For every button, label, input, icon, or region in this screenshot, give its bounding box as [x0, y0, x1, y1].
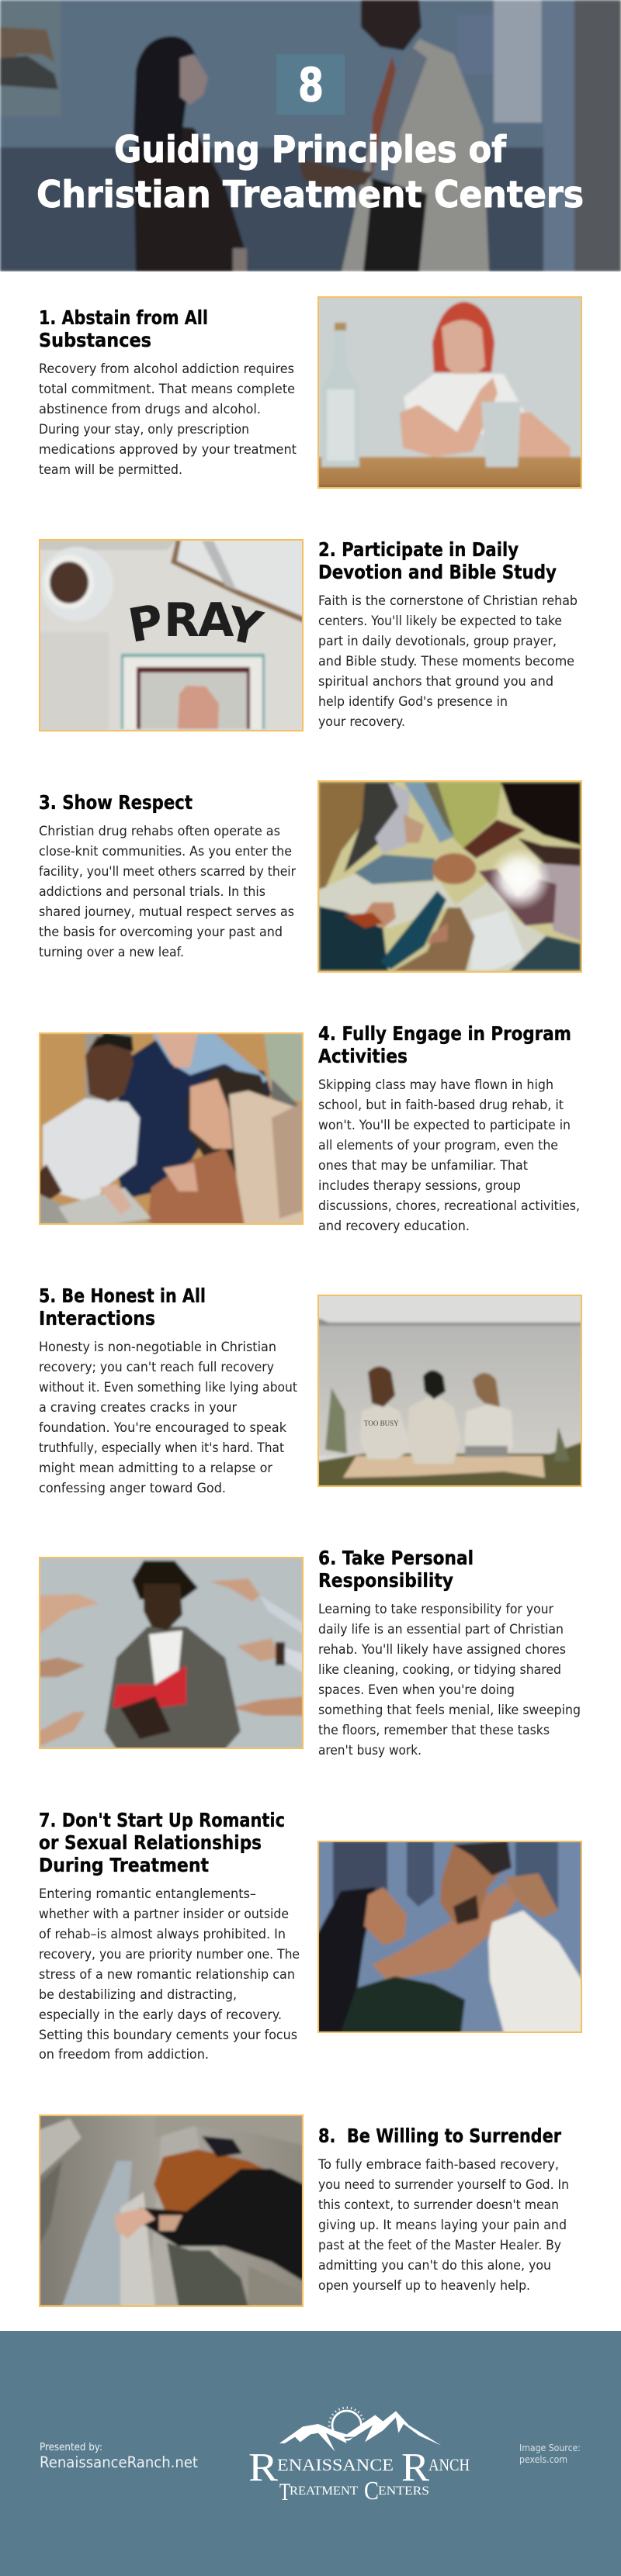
body text 7: Entering romantic entanglements– — [39, 1886, 256, 1901]
body text 7 — [39, 1886, 300, 2062]
heading 8: 8. Be Willing to Surrender — [318, 2125, 562, 2147]
PRAY letters: A — [198, 593, 234, 648]
logo: Renaissance Ranch Treatment Centers — [248, 2408, 470, 2505]
number badge — [276, 54, 345, 115]
section 5: honesty — [39, 1285, 582, 1495]
PRAY letters: R — [164, 593, 199, 648]
heading 6: 6. Take Personal — [318, 1547, 474, 1569]
body text 1: total commitment. That means complete — [39, 381, 295, 396]
photo: three friends by a lake — [317, 1295, 582, 1487]
body text 7: Setting this boundary cements your focus — [39, 2027, 297, 2042]
icon: sun and mountains — [279, 2408, 441, 2452]
body text 5: Honesty is non-negotiable in Christian — [39, 1339, 276, 1354]
body text 4: Skipping class may have flown in high — [318, 1077, 553, 1092]
body text 1: During your stay, only prescription — [39, 421, 249, 437]
body text 4: discussions, chores, recreational activities, — [318, 1198, 580, 1213]
body text 6: daily life is an essential part of Christian — [318, 1621, 564, 1637]
body text 7: especially in the early days of recovery. — [39, 2007, 282, 2022]
body text 5: truthfully, especially when it's hard. That — [39, 1440, 284, 1455]
section 3: show respect — [39, 776, 595, 983]
body text 5: without it. Even something like lying about — [39, 1379, 297, 1395]
body text 2: centers. You'll likely be expected to take — [318, 613, 562, 628]
heading 4: 4. Fully Engage in Program — [318, 1022, 571, 1045]
body text 2: spiritual anchors that ground you and — [318, 673, 553, 689]
body text 6: spaces. Even when you're doing — [318, 1682, 515, 1697]
number badge: 8 — [298, 58, 324, 112]
body text 6: the floors, remember that these tasks — [318, 1722, 550, 1738]
logo: Renaissance Ranch Treatment Centers: ENTERS — [378, 2484, 429, 2498]
section 1: abstain — [39, 296, 582, 489]
heading 1: 1. Abstain from All — [39, 306, 208, 329]
body text 6: something that feels menial, like sweeping — [318, 1702, 581, 1717]
body text 3: Christian drug rehabs often operate as — [39, 823, 280, 838]
body text 7: recovery, you are priority number one. The — [39, 1946, 300, 1962]
body text 4: school, but in faith-based drug rehab, it — [318, 1097, 564, 1112]
body text 7: on freedom from addiction. — [39, 2046, 209, 2062]
body text 4: ones that may be unfamiliar. That — [318, 1157, 528, 1173]
heading 2: 2. Participate in Daily — [318, 538, 519, 561]
body text 3: turning over a new leaf. — [39, 944, 184, 960]
heading 5: Interactions — [39, 1307, 155, 1329]
PRAY letters — [124, 593, 268, 657]
logo: Renaissance Ranch Treatment Centers: C — [364, 2477, 379, 2505]
body text 8: you need to surrender yourself to God. In — [318, 2177, 569, 2192]
logo: Renaissance Ranch Treatment Centers: ANCH — [428, 2455, 470, 2474]
body text 6: aren't busy work. — [318, 1742, 422, 1758]
logo: Renaissance Ranch Treatment Centers: REATMENT — [290, 2484, 358, 2498]
body text 3 — [39, 823, 296, 960]
body text 8 — [317, 2156, 569, 2293]
presented by: Presented by: — [40, 2442, 102, 2453]
photo: man with notebook, fingers pointing — [39, 1557, 304, 1749]
section 7: no romantic relationships — [39, 1809, 582, 2062]
body text 2: part in daily devotionals, group prayer, — [318, 633, 557, 648]
heading 4 — [318, 1022, 571, 1067]
body text 5: confessing anger toward God. — [39, 1480, 226, 1495]
title: Guiding Principles of — [114, 129, 506, 171]
body text 8: past at the feet of the Master Healer. By — [318, 2237, 561, 2253]
heading 5: 5. Be Honest in All — [39, 1285, 206, 1307]
body text 4: won't. You'll be expected to participate in — [318, 1117, 571, 1132]
body text 2: and Bible study. These moments become — [318, 653, 574, 669]
body text 2: Faith is the cornerstone of Christian rehab — [318, 593, 578, 608]
heading 2: Devotion and Bible Study — [318, 561, 557, 583]
body text 6 — [318, 1601, 581, 1758]
body text 4: includes therapy sessions, group — [318, 1177, 521, 1193]
logo: Renaissance Ranch Treatment Centers: R — [401, 2446, 429, 2490]
body text 8: open yourself up to heavenly help. — [318, 2277, 530, 2293]
body text 3: addictions and personal trials. In this — [39, 883, 265, 899]
body text 1 — [39, 361, 297, 477]
body text 6: like cleaning, cooking, or tidying shared — [318, 1661, 561, 1677]
presented by: RenaissanceRanch.net — [40, 2453, 198, 2471]
body text 5: might mean admitting to a relapse or — [39, 1460, 272, 1475]
heading 1: Substances — [39, 329, 151, 351]
heading 2 — [318, 538, 557, 583]
section 2: daily devotion — [39, 538, 578, 731]
body text 1: team will be permitted. — [39, 462, 182, 477]
title — [36, 129, 584, 216]
body text 1: abstinence from drugs and alcohol. — [39, 401, 261, 417]
heading 7 — [39, 1809, 285, 1876]
heading 3: 3. Show Respect — [39, 791, 193, 814]
body text 2 — [318, 593, 578, 729]
photo: embracing couple — [317, 1841, 582, 2033]
body text 8: this context, to surrender doesn't mean — [318, 2197, 559, 2212]
logo: Renaissance Ranch Treatment Centers: ENAISSANCE — [277, 2455, 394, 2474]
PRAY letters: P — [124, 594, 168, 654]
heading 5 — [39, 1285, 206, 1329]
body text 1: medications approved by your treatment — [39, 441, 297, 457]
image source — [519, 2443, 581, 2465]
section 8: surrender — [39, 2114, 569, 2307]
footer panel — [0, 2331, 621, 2576]
body text 2: your recovery. — [318, 714, 405, 729]
photo: group around a laptop — [39, 1032, 304, 1225]
body text 2: help identify God's presence in — [318, 693, 508, 709]
logo: Renaissance Ranch Treatment Centers: T — [279, 2477, 290, 2505]
body text 5: foundation. You're encouraged to speak — [39, 1419, 286, 1435]
section 4: program activities — [39, 1022, 580, 1233]
body text 3: facility, you'll meet others scarred by their — [39, 863, 296, 879]
heading 1 — [39, 306, 208, 351]
image source: Image Source: — [519, 2443, 581, 2453]
photo: hands joined in a circle — [317, 780, 582, 973]
body text 6: rehab. You'll likely have assigned chores — [318, 1641, 566, 1657]
photo: woman refusing a drink — [317, 296, 582, 489]
heading 4: Activities — [318, 1045, 408, 1067]
body text 7: of rehab–is almost always prohibited. In — [39, 1926, 286, 1942]
body text 7: be destabilizing and distracting, — [39, 1986, 237, 2002]
body text 5: recovery; you can't reach full recovery — [39, 1359, 274, 1374]
body text 1: Recovery from alcohol addiction requires — [39, 361, 294, 376]
body text 7: whether with a partner insider or outside — [39, 1906, 289, 1921]
image source: pexels.com — [519, 2454, 567, 2465]
heading 7: 7. Don't Start Up Romantic — [39, 1809, 285, 1831]
heading 7: During Treatment — [39, 1854, 209, 1876]
PRAY letters: Y — [222, 596, 268, 657]
body text 3: shared journey, mutual respect serves as — [39, 904, 294, 919]
body text 8: giving up. It means laying your pain and — [318, 2217, 567, 2232]
heading 7: or Sexual Relationships — [39, 1831, 262, 1854]
photo: pray letters and bible — [39, 539, 304, 731]
logo: Renaissance Ranch Treatment Centers: R — [248, 2446, 278, 2490]
title: Christian Treatment Centers — [36, 174, 584, 216]
body text 4: all elements of your program, even the — [318, 1137, 558, 1153]
shirt text: TOO BUSY — [364, 1419, 399, 1427]
body text 3: close-knit communities. As you enter the — [39, 843, 292, 859]
heading 6 — [318, 1547, 474, 1592]
body text 5 — [39, 1339, 297, 1495]
header photo: doctor talking with patient — [0, 0, 621, 271]
photo: woman bowing over a pew — [39, 2114, 304, 2307]
body text 6: Learning to take responsibility for your — [318, 1601, 553, 1616]
body text 8: To fully embrace faith-based recovery, — [317, 2156, 559, 2172]
header banner — [0, 0, 621, 271]
body text 3: the basis for overcoming your past and — [39, 924, 283, 939]
body text 4: and recovery education. — [318, 1218, 470, 1233]
body text 7: stress of a new romantic relationship can — [39, 1966, 295, 1982]
body text 4 — [318, 1077, 580, 1233]
section 6: personal responsibility — [39, 1547, 581, 1758]
presented by — [40, 2442, 198, 2471]
body text 5: a craving creates cracks in your — [39, 1399, 237, 1415]
heading 6: Responsibility — [318, 1569, 453, 1592]
body text 8: admitting you can't do this alone, you — [318, 2257, 551, 2273]
